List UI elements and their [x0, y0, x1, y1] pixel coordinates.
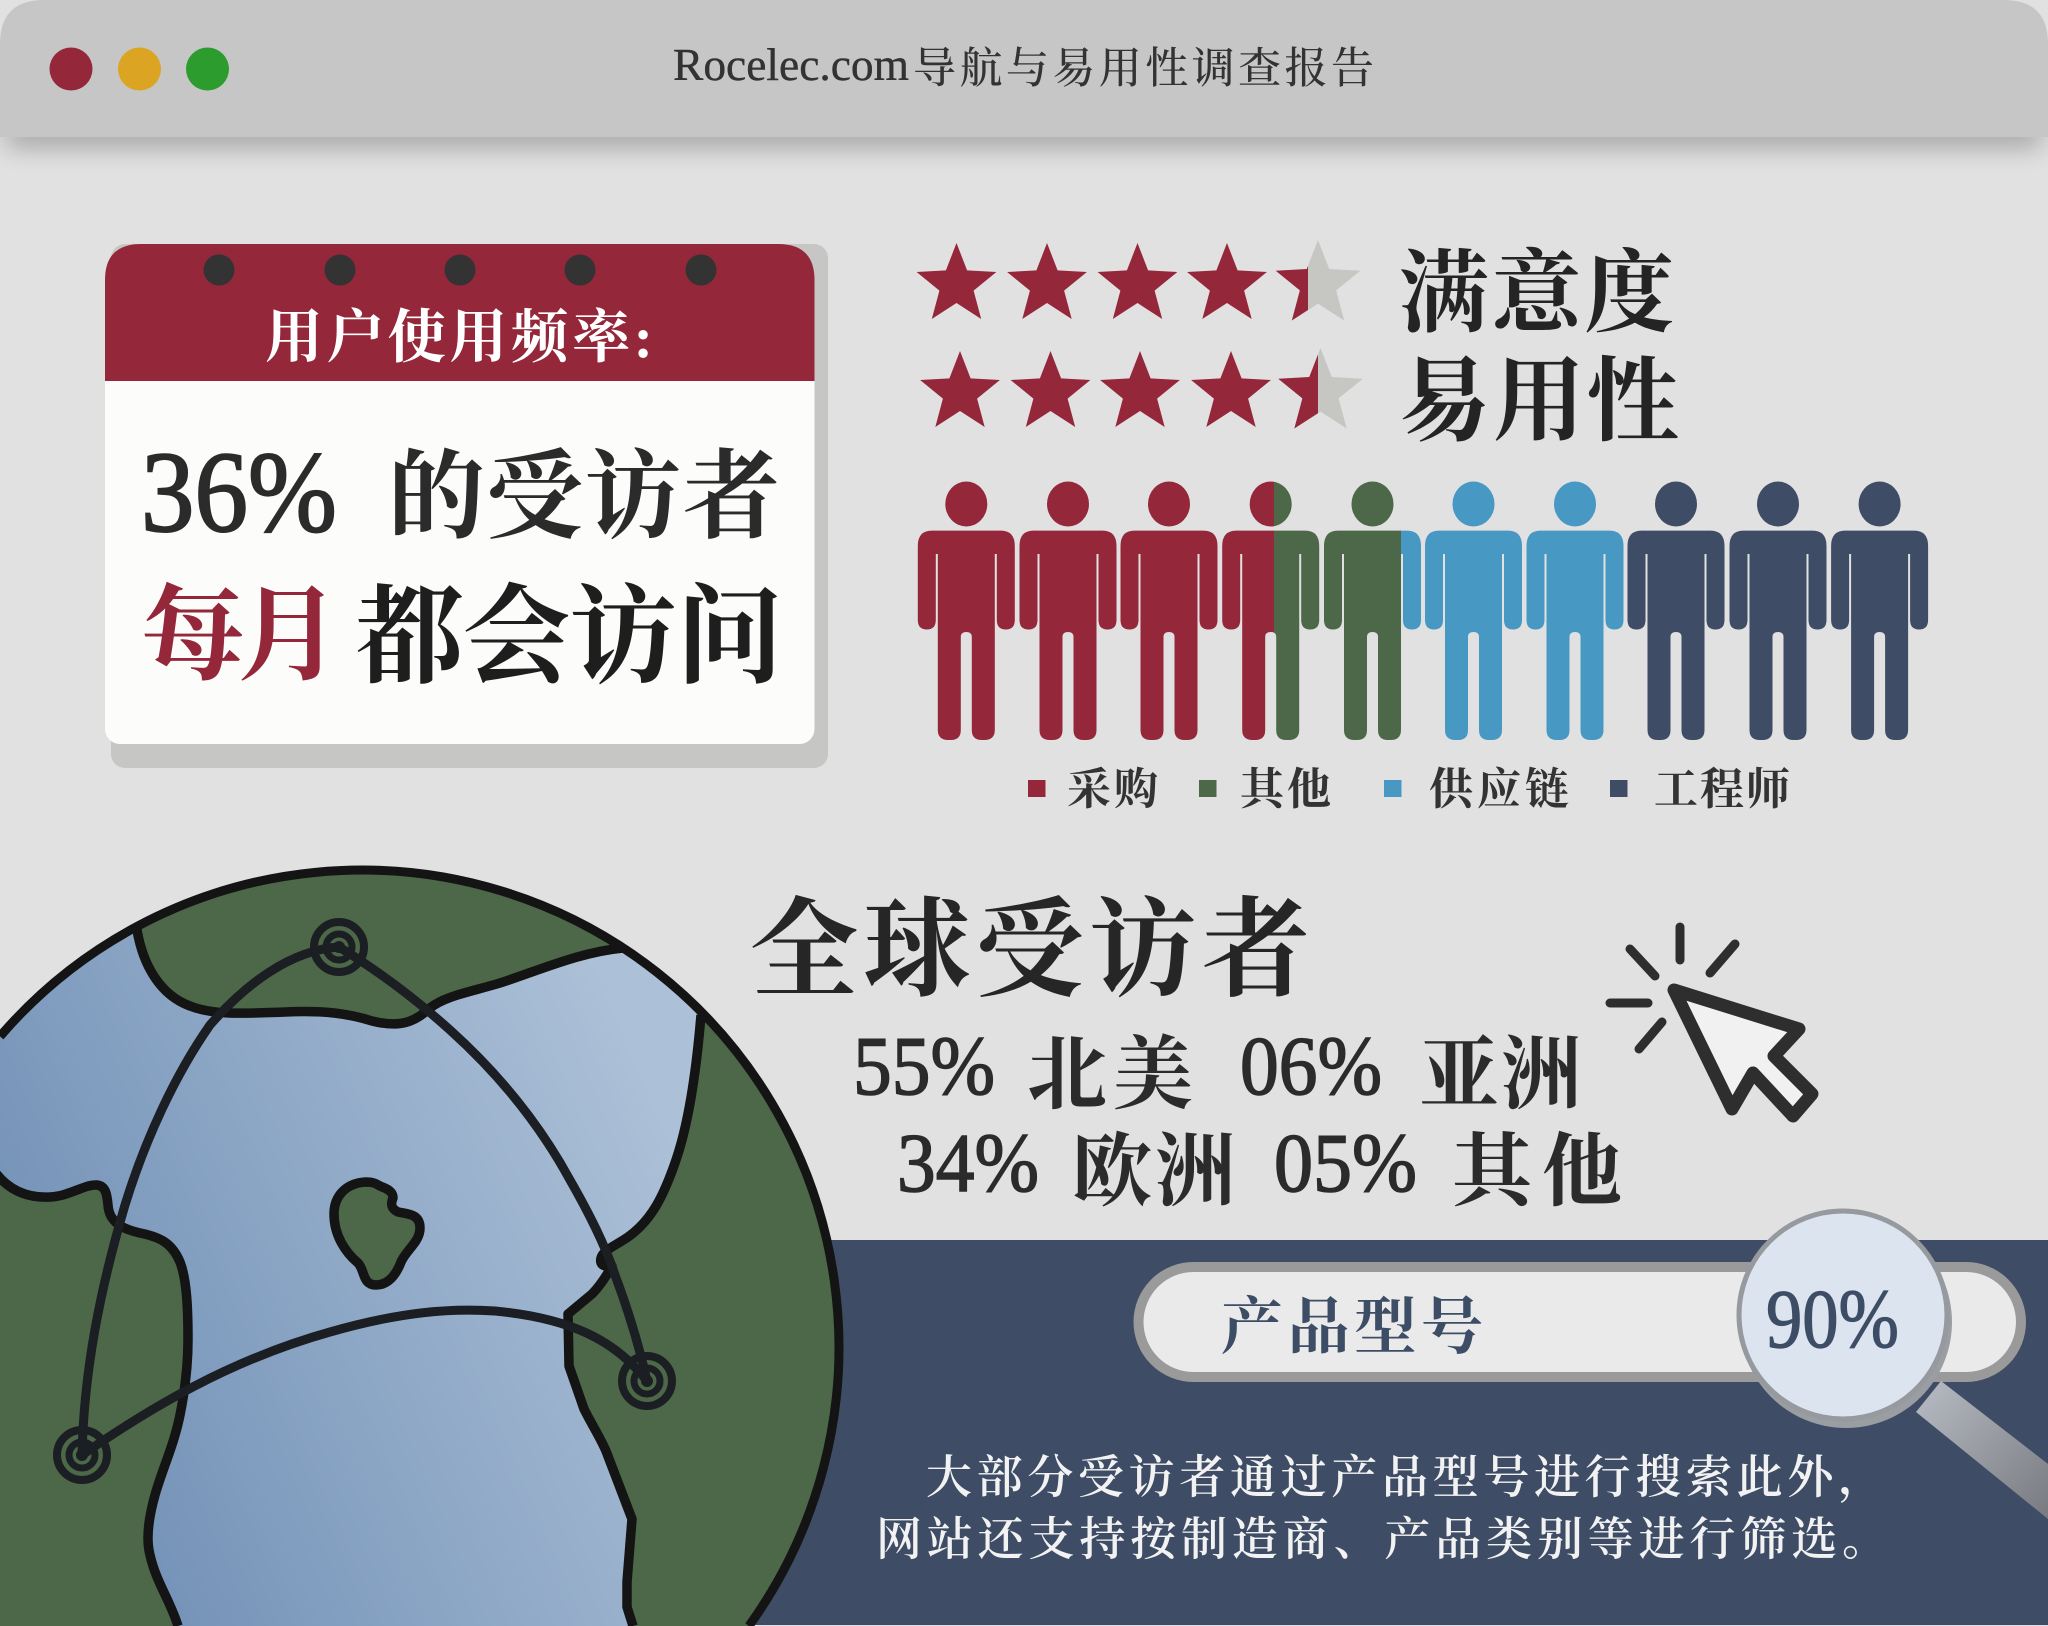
route lines	[82, 947, 647, 1455]
satisfaction label: 满意度	[1399, 245, 1674, 344]
regional statistics row 1	[853, 1020, 1581, 1120]
people chart legend: 工程师	[1654, 765, 1790, 814]
eastern landmass	[568, 1000, 860, 1626]
satisfaction rating stars	[917, 240, 1360, 321]
people chart legend	[1028, 765, 1790, 814]
page title: 导航与易用性调查报告	[913, 46, 1374, 93]
calendar statistic line 2: 每月	[141, 579, 341, 694]
regional statistics row 1: 06%	[1240, 1020, 1382, 1113]
people pictogram chart	[918, 482, 1928, 740]
magnifying glass	[1739, 1211, 2048, 1519]
calendar statistic line 2: 都会访问	[356, 579, 784, 698]
regional statistics row 1: 55%	[853, 1020, 995, 1113]
global respondents heading: 全球受访者	[750, 892, 1310, 1011]
calendar statistic line 1: 36%	[141, 429, 337, 557]
people chart legend: 其他	[1240, 765, 1331, 814]
description paragraph: 网站还支持按制造商、产品类别等进行筛选。	[876, 1514, 1888, 1565]
product model search bar	[1138, 1267, 2021, 1377]
regional statistics row 2: 欧洲	[1072, 1129, 1235, 1217]
page title: Rocelec.com	[673, 39, 909, 90]
calendar statistic line 1	[141, 429, 780, 557]
calendar statistic line 2	[141, 579, 784, 698]
description paragraph: 大部分受访者通过产品型号进行搜索此外，	[926, 1452, 1884, 1504]
search bar label: 产品型号	[1221, 1294, 1483, 1362]
regional statistics row 2	[897, 1117, 1622, 1217]
browser title bar	[0, 0, 2048, 146]
navy bottom panel	[700, 1240, 2048, 1625]
central island	[334, 1182, 420, 1285]
page title	[673, 39, 1374, 93]
cursor icon with click rays	[1610, 927, 1812, 1116]
globe illustration	[0, 860, 860, 1626]
magnifier value: 90%	[1766, 1273, 1899, 1366]
regional statistics row 1: 亚洲	[1419, 1032, 1581, 1120]
magnifier handle	[1916, 1381, 2048, 1519]
western landmass	[0, 1172, 188, 1626]
regional statistics row 1: 北美	[1027, 1032, 1193, 1120]
calendar heading: 用户使用频率:	[265, 305, 653, 370]
window button yellow	[118, 48, 161, 90]
people chart legend: 采购	[1067, 765, 1158, 814]
regional statistics row 2: 其他	[1452, 1129, 1622, 1217]
calendar binding holes	[204, 254, 716, 286]
route node west	[57, 1430, 107, 1480]
regional statistics row 2: 05%	[1274, 1117, 1417, 1210]
window button red	[50, 48, 92, 90]
usability rating stars	[920, 348, 1363, 429]
route node east	[622, 1356, 672, 1406]
window button green	[186, 48, 229, 90]
calendar card	[105, 244, 828, 768]
usability label: 易用性	[1399, 351, 1679, 453]
calendar statistic line 1: 的受访者	[388, 444, 780, 551]
route node north	[314, 922, 364, 972]
northern landmass	[130, 860, 623, 1024]
people chart legend: 供应链	[1429, 765, 1569, 814]
description paragraph	[876, 1452, 1888, 1565]
regional statistics row 2: 34%	[897, 1117, 1039, 1210]
